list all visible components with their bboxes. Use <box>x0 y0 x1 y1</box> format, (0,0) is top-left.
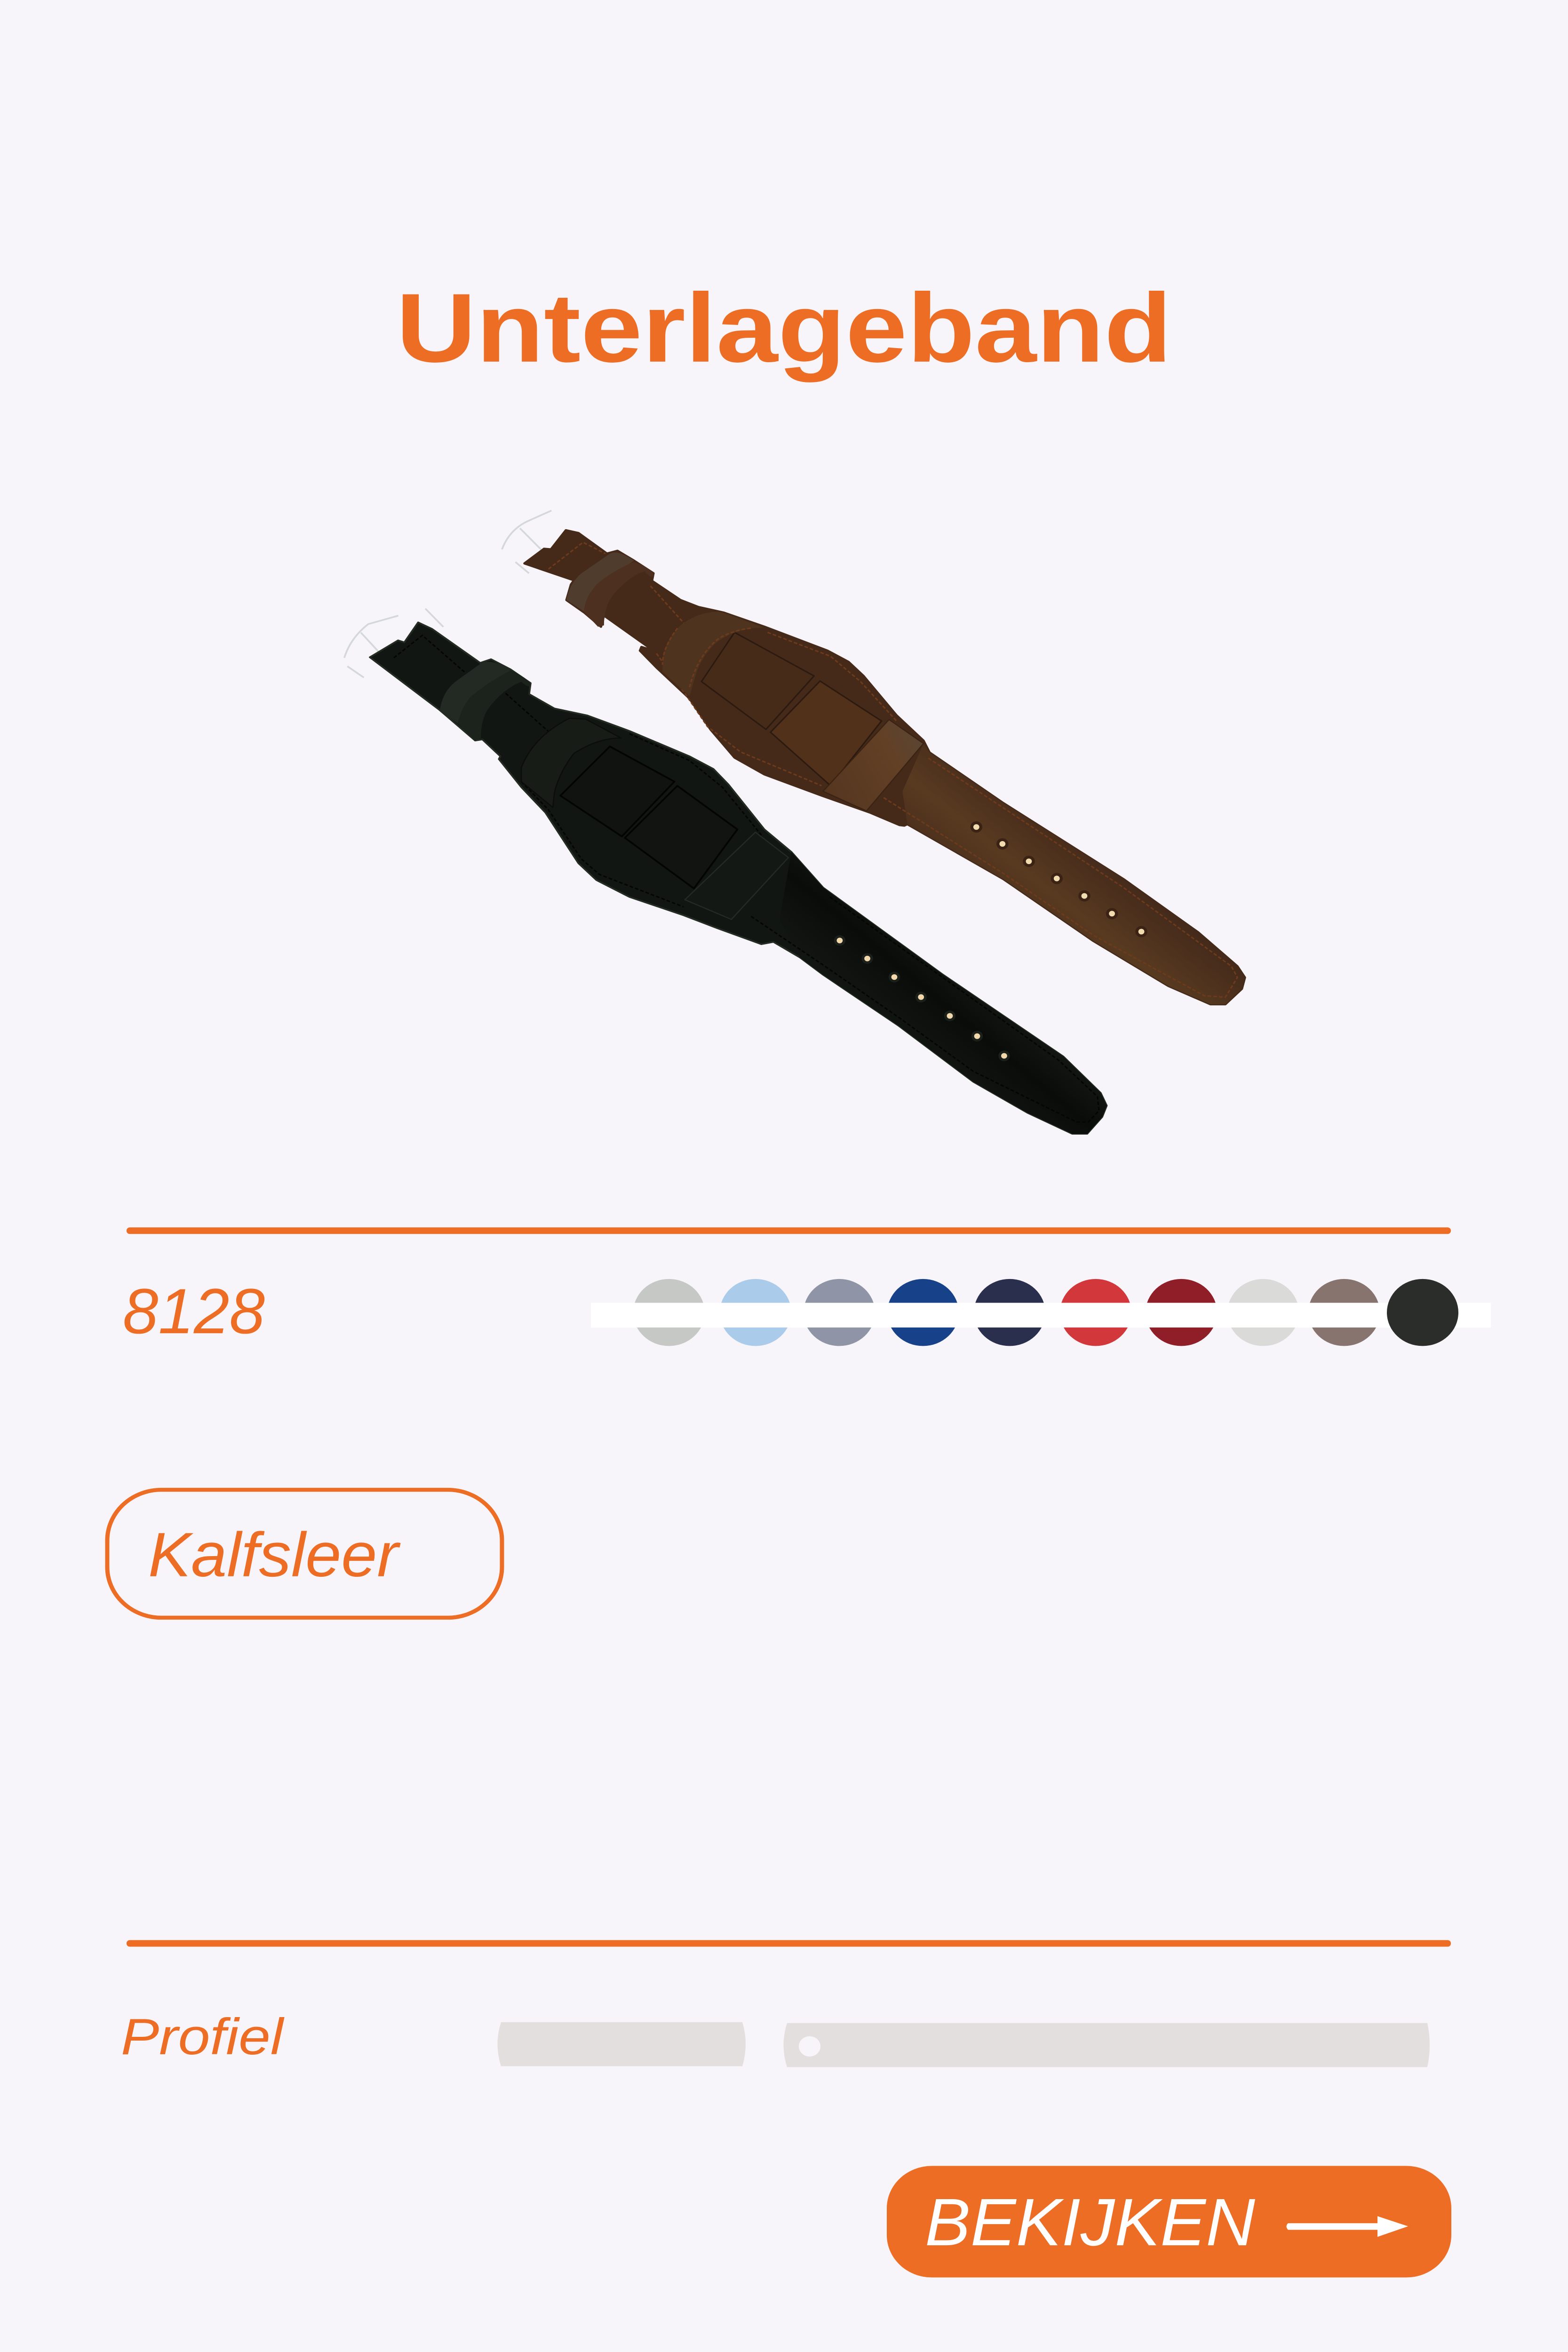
article number: 8128 <box>123 1275 265 1347</box>
title: Unterlageband <box>396 273 1172 382</box>
strap profile: long piece <box>784 2023 1430 2067</box>
black tail <box>780 852 1107 1134</box>
brown tail <box>902 743 1245 1004</box>
button: BEKIJKEN <box>925 2185 1256 2260</box>
black stitching <box>394 636 1099 1122</box>
brown keepers <box>566 552 634 611</box>
brown strap <box>502 510 1245 1004</box>
divider bottom <box>127 1940 1451 1947</box>
brown stitching <box>549 542 1237 997</box>
material tag <box>107 1490 502 1618</box>
black holes <box>834 935 1010 1061</box>
divider top <box>127 1227 1451 1234</box>
material tag: Kalfsleer <box>148 1520 401 1590</box>
button <box>887 2166 1451 2278</box>
colour swatches <box>591 1279 1491 1346</box>
black pads <box>560 747 674 836</box>
brown pads <box>701 632 814 730</box>
black keepers <box>440 662 510 723</box>
product photo: two leather cuff watch straps <box>344 510 1245 1134</box>
brown holes <box>971 821 1147 937</box>
arrow <box>1286 2216 1408 2237</box>
black strap <box>344 609 1107 1134</box>
profile label: Profiel <box>121 2008 285 2065</box>
strap profile: short piece <box>498 2022 746 2066</box>
